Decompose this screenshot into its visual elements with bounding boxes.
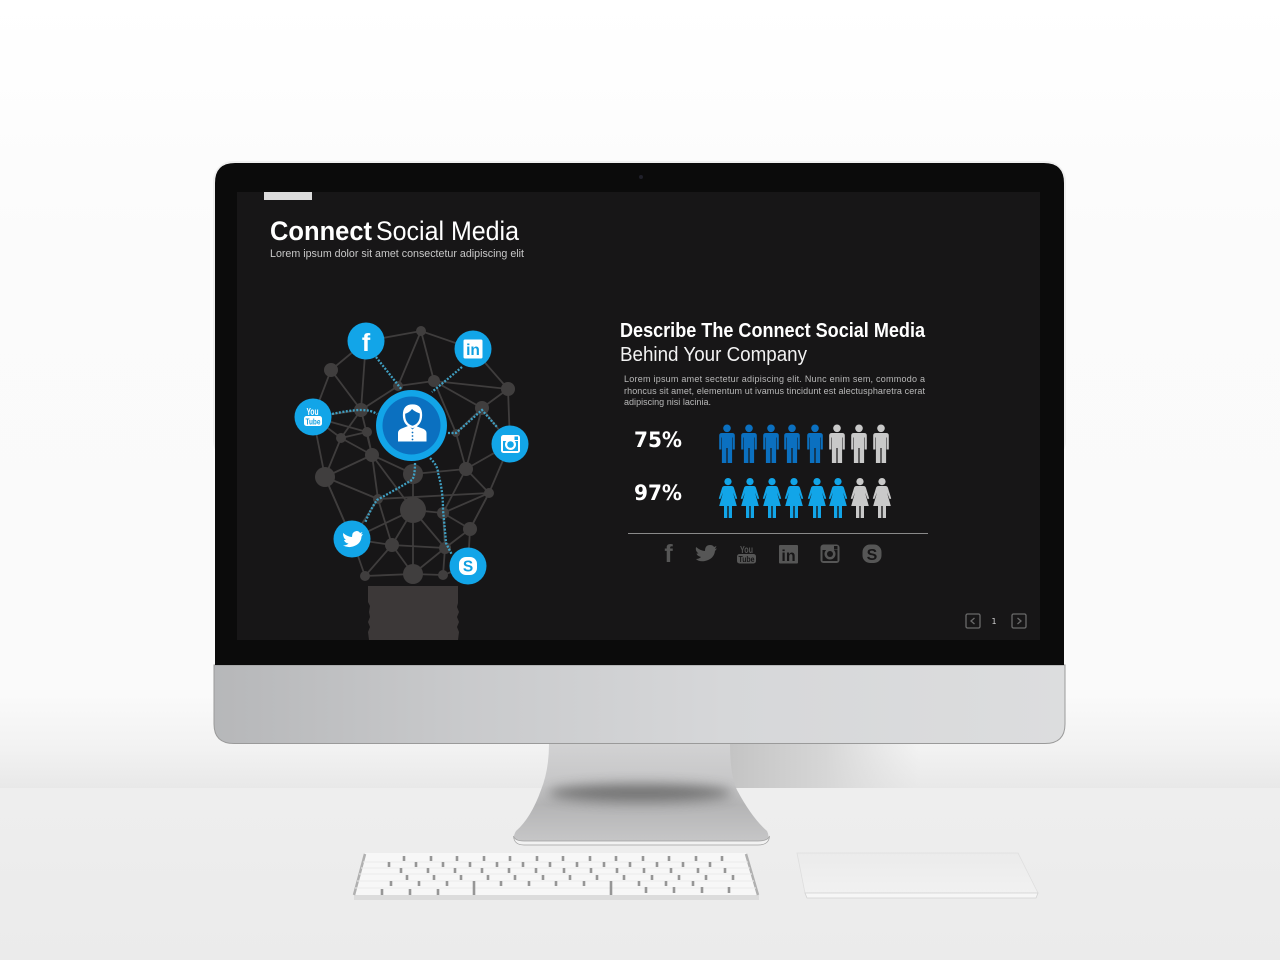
person hair [404,405,422,414]
icon: youtube grey [737,545,756,564]
grey social icon row [664,540,882,568]
icon: twitter [334,520,370,558]
icon: facebook [348,322,384,360]
monitor black bezel [215,163,1064,665]
description body text: adipiscing nisi lacinia. [624,397,711,407]
webcam [639,175,643,179]
previous button [966,614,980,628]
icon: facebook grey: f [664,540,673,568]
monitor outer rim [213,161,1066,461]
icon: skype [450,548,486,584]
stat: 75%: 75% [634,428,682,452]
icon: skype grey: S [867,547,878,564]
icon: twitter grey [696,545,717,561]
bulb base [368,586,459,640]
icon: instagram grey [820,544,840,563]
description heading [620,320,926,366]
icon: skype grey [862,544,882,564]
next button [1012,614,1026,628]
icon: youtube: You [306,407,318,418]
pictogram row: women [719,478,891,518]
network lines [313,331,510,576]
icon: instagram [492,426,528,462]
description body text [624,374,925,407]
desk surface [0,788,1280,960]
description body text: rhoncus sit amet, elementum ut ivamus tincidunt est alectuspharetra cerat [624,386,925,396]
center person badge [376,390,447,461]
title: Connect [270,216,372,246]
person collar and buttons [409,426,416,430]
icon: youtube grey: You [740,545,753,556]
icon: youtube [294,398,332,436]
icon: skype: S [463,558,473,576]
stat: 97%: 97% [634,481,682,505]
icon: youtube: Tube [306,416,321,426]
description heading: Behind Your Company [620,344,807,366]
person shoulders [398,426,426,442]
monitor stand [514,744,770,845]
page number: 1 [991,617,997,626]
icon: facebook: f [362,329,371,357]
wall shadow behind stand [730,744,920,788]
subtitle: Lorem ipsum dolor sit amet consectetur adipiscing elit [270,248,524,260]
dotted connectors [332,357,497,555]
light bulb network diagram [294,322,528,640]
title: Social Media [376,216,520,246]
description heading: Describe The Connect Social Media [620,320,926,342]
network nodes [315,326,515,584]
description body text: Lorem ipsum amet sectetur adipiscing elit. Nunc enim sem, commodo a [624,374,925,384]
monitor chin [214,665,1065,744]
pagination [966,614,1026,628]
person head [404,406,421,427]
icon: linkedin grey [779,545,798,565]
trackpad [797,853,1038,898]
icon: youtube grey: Tube [738,555,755,564]
keyboard [354,853,759,900]
icon: linkedin grey: in [781,548,796,565]
monitor [213,161,1066,744]
pictogram row: men [719,424,889,463]
icon: linkedin: in [466,342,480,359]
icon: linkedin [454,330,492,368]
screen [237,192,1040,640]
title accent bar [264,192,312,200]
